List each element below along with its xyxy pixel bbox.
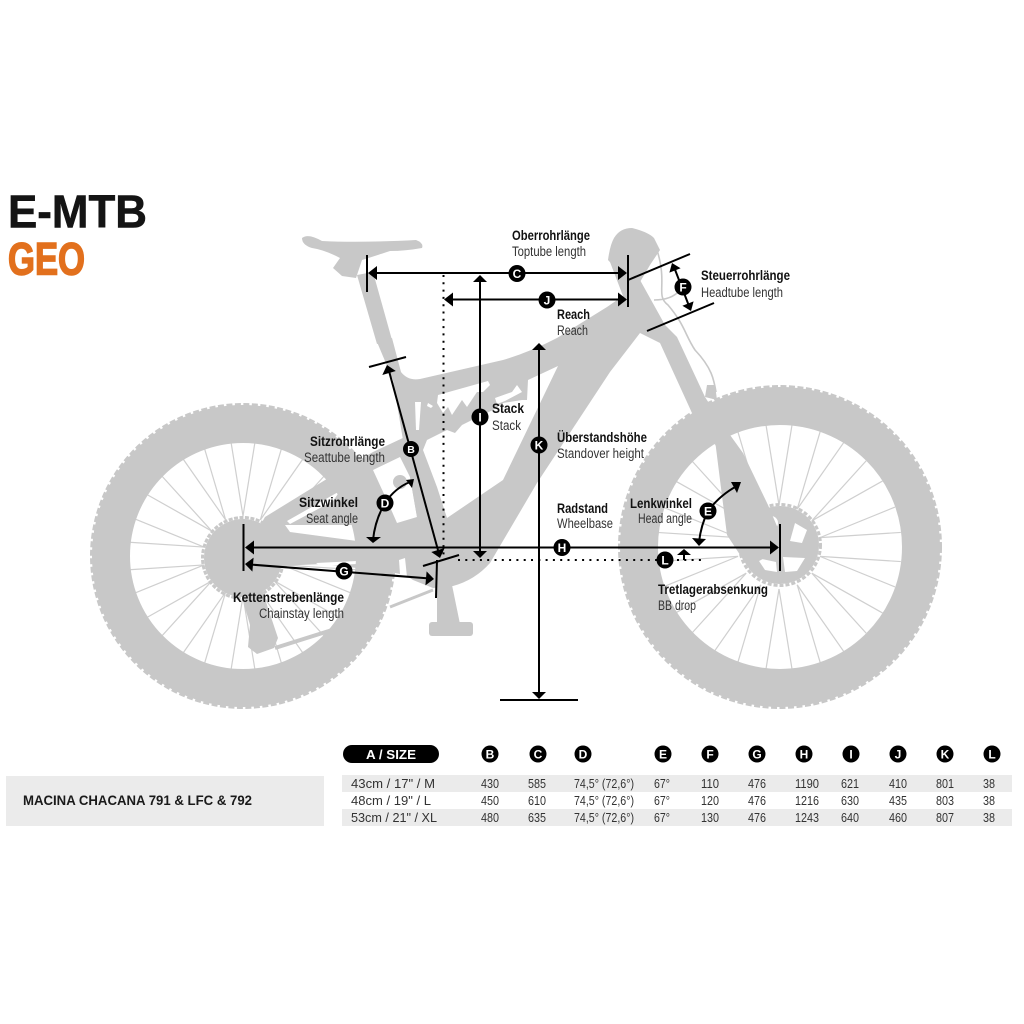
saddle [302,236,422,278]
label: Oberrohrlänge: Oberrohrlänge [512,228,590,243]
measure I: stack [472,275,488,558]
row 53cm: 460 [889,811,907,825]
label: Überstandshöhe [557,430,647,461]
heading: GEO: GEO [8,234,85,284]
label: Tretlagerabsenkung [658,582,768,613]
label: Stack: Stack [492,401,524,416]
table rows [342,775,1012,826]
row 43cm: 43cm / 17" / M [351,777,435,791]
column badges: C [534,747,543,761]
row 48cm: 38 [983,794,995,808]
measure C: toptube [367,255,628,307]
size pill: A / SIZE [366,747,416,762]
row 53cm: 640 [841,811,859,825]
rear derailleur and chain [240,590,433,654]
row 53cm: 53cm / 21" / XL [351,811,437,825]
label: Tretlagerabsenkung: Tretlagerabsenkung [658,582,768,597]
measure B: seattube [369,357,459,566]
frame gaps [285,457,417,577]
dotted reference lines [444,275,703,560]
row 43cm: 621 [841,777,859,791]
row 48cm: 630 [841,794,859,808]
row 48cm: 610 [528,794,546,808]
row 43cm: 410 [889,777,907,791]
measure K: standover height [500,343,578,700]
measure G: chainstay [245,558,437,598]
label: Stack [492,401,524,433]
label: Radstand: Radstand [557,501,608,516]
table header [343,745,1000,763]
cassette [202,518,284,598]
column badges: J [895,747,901,761]
label: Überstandshöhe: Überstandshöhe [557,430,647,445]
column badges: D [579,747,588,761]
front brake disc [740,504,820,586]
measure D: seat angle: D [381,496,390,510]
row 53cm: 67° [654,811,670,825]
label: Kettenstrebenlänge [233,590,344,621]
measure E: head angle: E [704,504,712,518]
measure H: wheelbase [244,524,780,571]
row 53cm: 480 [481,811,499,825]
row 48cm: 74,5° (72,6°) [574,794,634,808]
label: Reach: Reach [557,323,588,338]
rear wheel spokes [129,442,357,670]
measure E: head angle [692,482,741,546]
row 53cm: 130 [701,811,719,825]
column badges: I [849,747,853,761]
rear tire [92,404,394,708]
row 43cm: 110 [701,777,719,791]
row 53cm: 38 [983,811,995,825]
panel: model name: MACINA CHACANA 791 & LFC & 792 [23,793,252,808]
front tire [620,386,940,708]
measure C: toptube: C [513,267,522,281]
row 53cm: 476 [748,811,766,825]
measure L: BB drop: L [661,553,669,567]
column badges: F [706,747,714,761]
bike silhouette [92,228,940,708]
label: Stack: Stack [492,418,521,433]
column badges: H [800,747,808,761]
brake cable [654,250,716,392]
label: Steuerrohrlänge: Headtube length [701,285,783,300]
label: Kettenstrebenlänge: Kettenstrebenlänge [233,590,344,605]
measure F: headtube [628,254,714,331]
main frame [377,262,665,588]
row 43cm: 430 [481,777,499,791]
label: Lenkwinkel: Lenkwinkel [630,496,692,511]
row 53cm: 635 [528,811,546,825]
column badges: G [752,747,762,761]
label: Sitzwinkel [299,495,358,526]
label: Reach: Reach [557,307,590,322]
row 48cm: 435 [889,794,907,808]
main triangle cutout [415,366,558,518]
row 43cm: 74,5° (72,6°) [574,777,634,791]
measure J: reach: J [544,293,550,307]
fork [640,320,785,567]
label: Oberrohrlänge [512,228,590,259]
crank and pedal [429,583,473,636]
label: Lenkwinkel: Head angle [638,511,692,526]
row 53cm [342,809,1012,826]
column badges: B [486,747,495,761]
label: Sitzwinkel: Sitzwinkel [299,495,358,510]
label: Radstand [557,501,613,531]
row 48cm: 803 [936,794,954,808]
row 48cm [351,794,995,808]
label: Steuerrohrlänge: Steuerrohrlänge [701,268,790,283]
suspension link [393,475,407,489]
label: Sitzrohrlänge [304,434,385,465]
label: Überstandshöhe: Standover height [557,446,644,461]
label: Oberrohrlänge: Toptube length [512,244,586,259]
label: Sitzwinkel: Seat angle [306,511,358,526]
column badges: K [941,747,950,761]
label: Radstand: Wheelbase [557,516,613,531]
row 48cm: 450 [481,794,499,808]
label: Lenkwinkel [630,496,692,526]
measure B: seattube: B [407,444,415,456]
measure L: BB drop [656,549,691,568]
size pill [343,745,439,763]
column badges: E [659,747,667,761]
label: Sitzrohrlänge: Sitzrohrlänge [310,434,385,449]
row 43cm: 801 [936,777,954,791]
label: Tretlagerabsenkung: BB drop [658,598,696,613]
row 53cm: 74,5° (72,6°) [574,811,634,825]
row 48cm: 1216 [795,794,819,808]
row 53cm: 807 [936,811,954,825]
seat post [357,272,392,344]
row 48cm: 48cm / 19" / L [351,794,431,808]
label: Sitzrohrlänge: Seattube length [304,450,385,465]
measure F: headtube: F [679,280,687,294]
row 48cm: 120 [701,794,719,808]
row 53cm: 1243 [795,811,819,825]
label: Reach [557,307,590,338]
rear triangle [243,437,445,588]
measure D: seat angle [366,479,414,543]
row 43cm: 38 [983,777,995,791]
row 43cm: 67° [654,777,670,791]
column badges: L [988,747,996,761]
disc holes [757,516,807,572]
row 43cm [342,775,1012,792]
measure K: standover height: K [535,438,544,452]
row 43cm: 1190 [795,777,819,791]
measure J: reach [444,292,627,308]
measure I: stack: I [478,410,482,424]
measure H: wheelbase: H [558,541,566,555]
row 48cm: 476 [748,794,766,808]
label: Steuerrohrlänge [701,268,790,300]
heading: E-MTB: E-MTB [8,186,147,238]
panel: model name [6,776,324,826]
handlebar [608,228,660,297]
column badges [482,746,1000,762]
front wheel spokes [657,425,901,669]
title [8,186,147,284]
measure G: chainstay: G [339,564,349,578]
row 43cm: 476 [748,777,766,791]
row 43cm: 585 [528,777,546,791]
row 48cm: 67° [654,794,670,808]
label: Kettenstrebenlänge: Chainstay length [259,606,344,621]
